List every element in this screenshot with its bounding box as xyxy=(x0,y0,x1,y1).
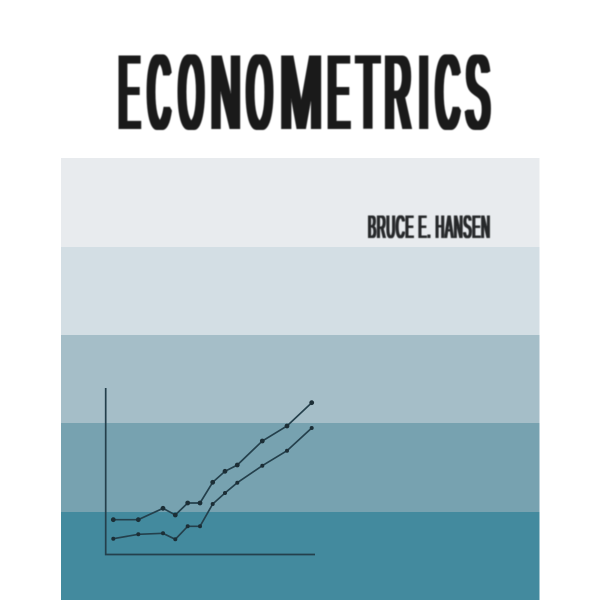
title: O xyxy=(247,32,272,152)
panel: colour bands xyxy=(61,158,540,600)
title: I xyxy=(419,32,429,152)
title: E xyxy=(328,32,349,152)
upper data line xyxy=(111,400,314,522)
title: M xyxy=(280,32,323,152)
title: T xyxy=(357,32,378,152)
line chart xyxy=(106,388,315,554)
chart axes xyxy=(106,388,315,554)
title: N xyxy=(211,32,240,152)
title: E xyxy=(118,32,139,152)
title: C xyxy=(436,32,459,152)
title: R xyxy=(385,32,411,152)
title xyxy=(118,32,492,152)
title: O xyxy=(179,32,203,152)
lower data line xyxy=(111,426,314,541)
title: S xyxy=(466,32,490,152)
title: C xyxy=(148,32,170,152)
author name: BRUCE E. HANSEN xyxy=(368,210,491,246)
